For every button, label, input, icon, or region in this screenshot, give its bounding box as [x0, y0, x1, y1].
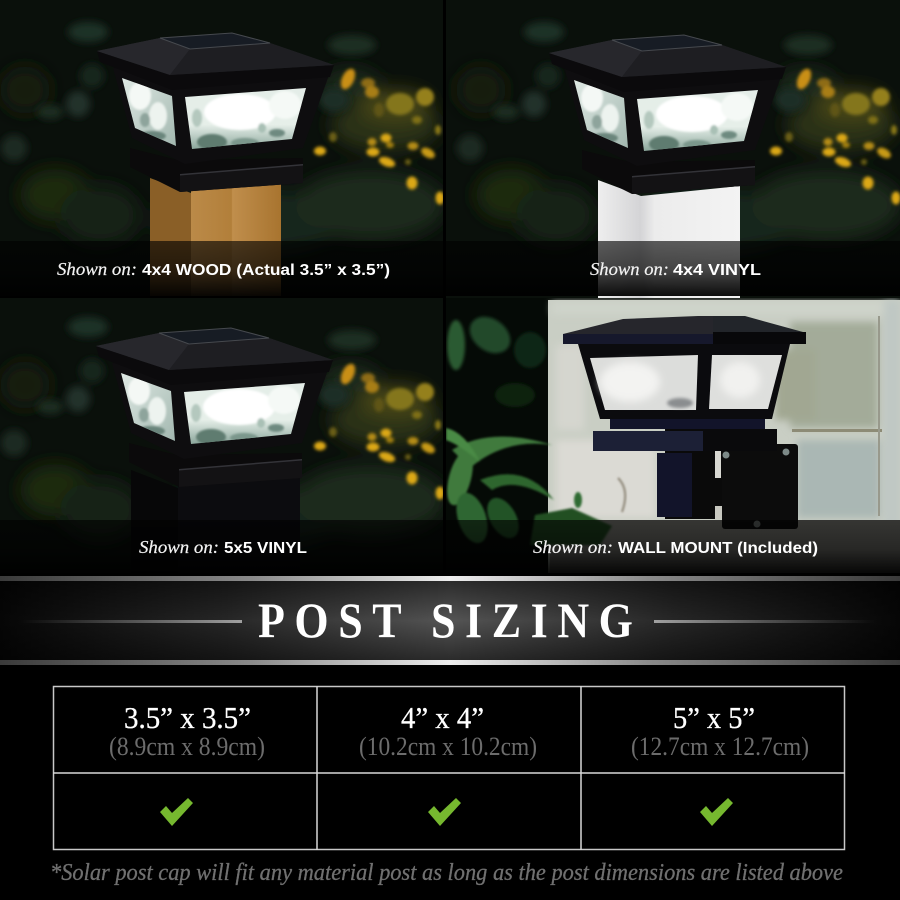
caption: Shown on: [590, 259, 669, 279]
caption band [0, 520, 443, 573]
wood post [150, 178, 281, 297]
column 2 size: 4” x 4” [401, 700, 484, 735]
panel: wall mount [442, 298, 900, 573]
caption: Shown on: [139, 537, 219, 557]
column 3 size: 5” x 5” [673, 700, 755, 735]
caption: Shown on: [533, 537, 613, 557]
icon: check 1 [160, 798, 193, 826]
title: POST SIZING [258, 593, 633, 649]
column 2 size: (10.2cm x 10.2cm) [359, 732, 537, 761]
wall mount lamp [563, 316, 806, 451]
column 2 size [359, 700, 537, 761]
caption: 5x5 VINYL [224, 540, 307, 557]
caption band [446, 520, 900, 573]
caption band [446, 241, 900, 296]
panel: 5x5 vinyl post [0, 298, 443, 554]
white vinyl post [598, 180, 740, 298]
column 3 size: (12.7cm x 12.7cm) [631, 732, 809, 761]
stone wall [548, 300, 900, 573]
column 1 size [109, 700, 265, 761]
column 1 size: (8.9cm x 8.9cm) [109, 732, 265, 761]
lamp on black post [96, 328, 333, 487]
panel: 4x4 vinyl post [446, 0, 900, 298]
column 3 size [631, 700, 809, 761]
sizing table [53, 686, 845, 850]
caption: WALL MOUNT (Included) [618, 540, 818, 557]
icon: check 3 [700, 798, 733, 826]
caption: 4x4 WOOD (Actual 3.5” x 3.5”) [142, 262, 390, 279]
black post [131, 470, 300, 536]
wall mount plate [657, 429, 798, 529]
column 1 size: 3.5” x 3.5” [124, 700, 251, 735]
caption band [0, 241, 443, 296]
caption: Shown on: [57, 259, 137, 279]
plant foliage [442, 309, 612, 547]
footnote: *Solar post cap will fit any material post as long as the post dimensions are listed above [50, 860, 843, 886]
icon: check 2 [428, 798, 461, 826]
caption: 4x4 VINYL [673, 262, 761, 279]
panel: 4x4 wood post [0, 0, 445, 297]
lamp on vinyl post [549, 35, 786, 194]
lamp on wood post [97, 33, 334, 192]
heading banner [0, 576, 900, 665]
